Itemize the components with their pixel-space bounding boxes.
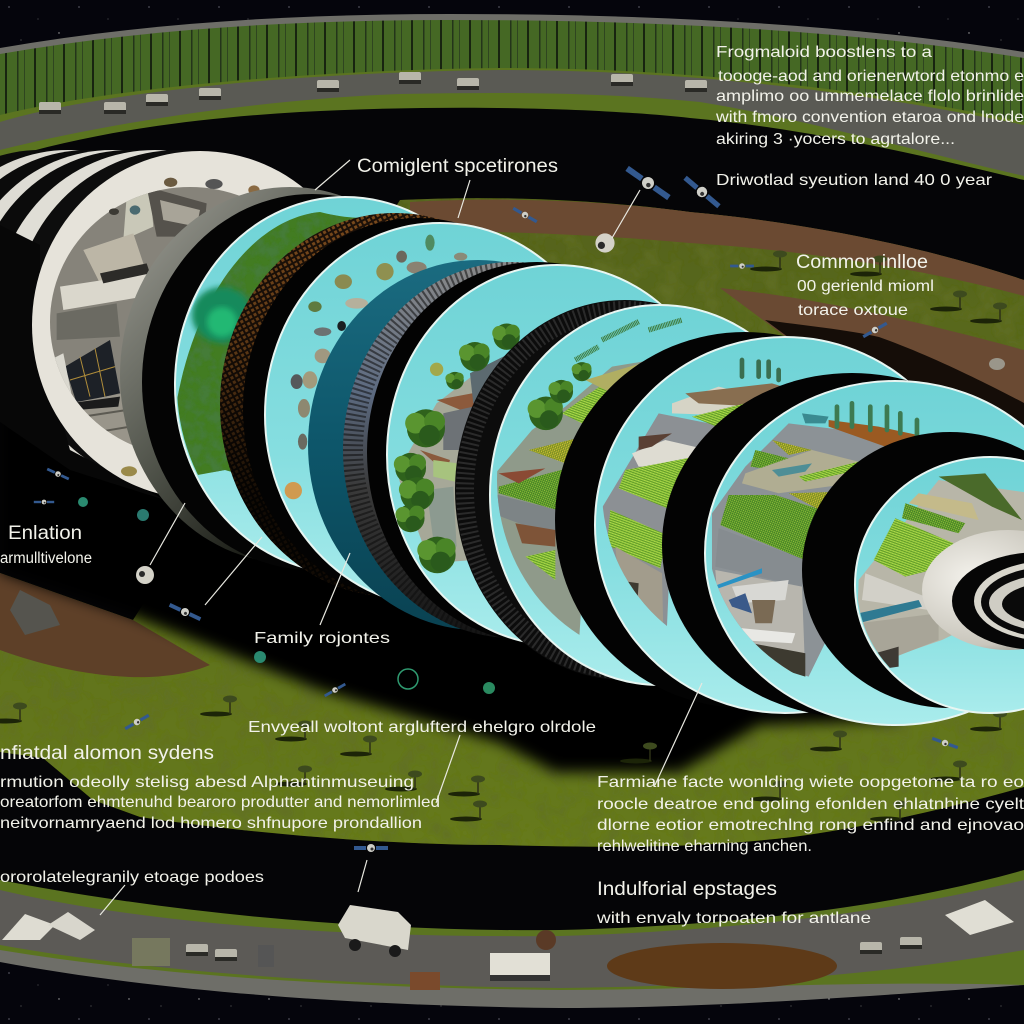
ring 3 teal shell	[308, 260, 648, 630]
callout: top right heading and body	[715, 44, 1024, 148]
back section interior machinery	[50, 187, 240, 445]
ring 6 shell	[662, 373, 1024, 717]
lower road	[0, 880, 1024, 988]
callout: top right heading and body: akiring 3 ·yocers to agrtalore...	[716, 131, 955, 148]
callout: common inlloe: torace oxtoue	[798, 302, 908, 319]
callout: lower right body: roocle deatroe end goling efonlden ehlatnhine cyelt	[597, 796, 1024, 813]
callout: lower left body: nfiatdal alomon sydens	[0, 743, 214, 764]
callout: lower right body: dlorne eotior emotrechlng rong enfind and ejnovao	[597, 817, 1024, 834]
leader lines	[100, 160, 702, 915]
label: envyeall: Envyeall woltont arglufterd ehelgro olrdole	[248, 719, 596, 736]
callout: industrial stages	[596, 879, 871, 927]
callout: common inlloe: Common inlloe	[796, 252, 928, 273]
ring 5 terraces	[602, 383, 780, 626]
label: component spectrum: Comiglent spcetirones	[357, 156, 558, 177]
label: enlation: Enlation	[8, 523, 82, 544]
ring 6: terraces and lab	[662, 373, 1024, 725]
callout: industrial stages: Indulforial epstages	[597, 879, 777, 900]
ring 2: mesh shell and aquatic wall	[220, 213, 615, 607]
ring 6 scene	[712, 413, 925, 677]
callout: top right heading and body: amplimo oo ummemelace flolo brinlide	[716, 88, 1024, 105]
ring 4 face	[490, 305, 830, 685]
ring 7 face	[855, 457, 1024, 713]
callout: duration line: Driwotlad syeution land 40 0 year	[716, 172, 993, 189]
rim pods	[109, 178, 260, 476]
field trees	[0, 250, 1007, 822]
ring 4 shell	[455, 300, 795, 680]
land: left brown patch	[0, 573, 210, 677]
ring 3 ribbed shell	[343, 262, 683, 638]
ring 3 face	[387, 265, 727, 645]
ring 6 face	[705, 381, 1024, 725]
land: lower brown strip	[720, 288, 1024, 420]
road structures: upper row	[39, 72, 707, 114]
callout: lower left body	[0, 743, 440, 832]
cylinder back section: striped shell	[0, 150, 304, 494]
callout: common inlloe	[796, 252, 934, 319]
ring 1 forest wall	[178, 212, 358, 475]
ring 7 scene	[855, 473, 1024, 670]
upper road	[0, 70, 1024, 176]
cast shadow below the cylinder	[0, 400, 900, 772]
ring 2 face	[265, 223, 615, 607]
land: upper brown strip	[410, 200, 1024, 296]
top forest band	[0, 20, 1024, 200]
ring 7 conical hub	[922, 530, 1024, 650]
callout: top right heading and body: toooge-aod and orienerwtord etonmo e	[718, 68, 1024, 85]
ring 4: terraces	[455, 300, 750, 686]
callout: top right heading and body: Frogmaloid boostlens to a	[716, 44, 932, 61]
callout: lower left body: rmution odeolly stelisg abesd Alphantinmuseuing	[0, 774, 414, 791]
label: storage pods: ororolatelegranily etoage podoes	[0, 869, 264, 886]
callout: lower left body: neitvornamryaend lod homero shfnupore prondallion	[0, 815, 422, 832]
ring 7: front ring	[802, 432, 1024, 713]
ring 4 terraces	[497, 362, 643, 635]
callout: lower right body	[597, 774, 1024, 855]
callout: lower left body: oreatorfom ehmtenuhd bearoro produtter and nemorlimled	[0, 794, 440, 811]
land: dark terminator	[765, 320, 1024, 480]
callout: lower right body: rehlwelitine eharning anchen.	[597, 838, 812, 855]
label: family rojontes: Family rojontes	[254, 630, 390, 647]
truck	[338, 905, 411, 957]
ring 5 face	[595, 337, 975, 713]
ring 7 shell	[802, 432, 1024, 708]
ring 3: teal and ribbed shell with village wall	[308, 260, 662, 642]
ring 1 face	[175, 197, 515, 573]
satellites and drones	[10, 163, 1005, 852]
ring 5: terraces	[555, 332, 908, 714]
callout: lower right body: Farmiane facte wonlding wiete oopgetome ta ro eo	[597, 774, 1024, 791]
shell: shaded lower left flank	[0, 225, 165, 500]
inner land surface	[0, 198, 1024, 847]
callout: common inlloe: 00 gerienld mioml	[797, 278, 934, 295]
ring 1: forest	[120, 187, 420, 568]
callout: top right heading and body: with fmoro convention etaroa ond lnode	[715, 109, 1024, 126]
ring 2 shells and pods	[285, 235, 467, 499]
label: enlation: armulltivelone	[0, 550, 92, 567]
ring 5 shell	[555, 332, 935, 708]
back section face	[32, 151, 368, 499]
ring 1 shell	[120, 187, 460, 563]
ring 2 mesh shell	[220, 213, 570, 597]
label: enlation	[0, 523, 92, 567]
ring 3 houses and trees	[399, 356, 505, 562]
callout: industrial stages: with envaly torpoaten for antlane	[596, 910, 871, 927]
road structures: lower row	[2, 900, 1014, 990]
